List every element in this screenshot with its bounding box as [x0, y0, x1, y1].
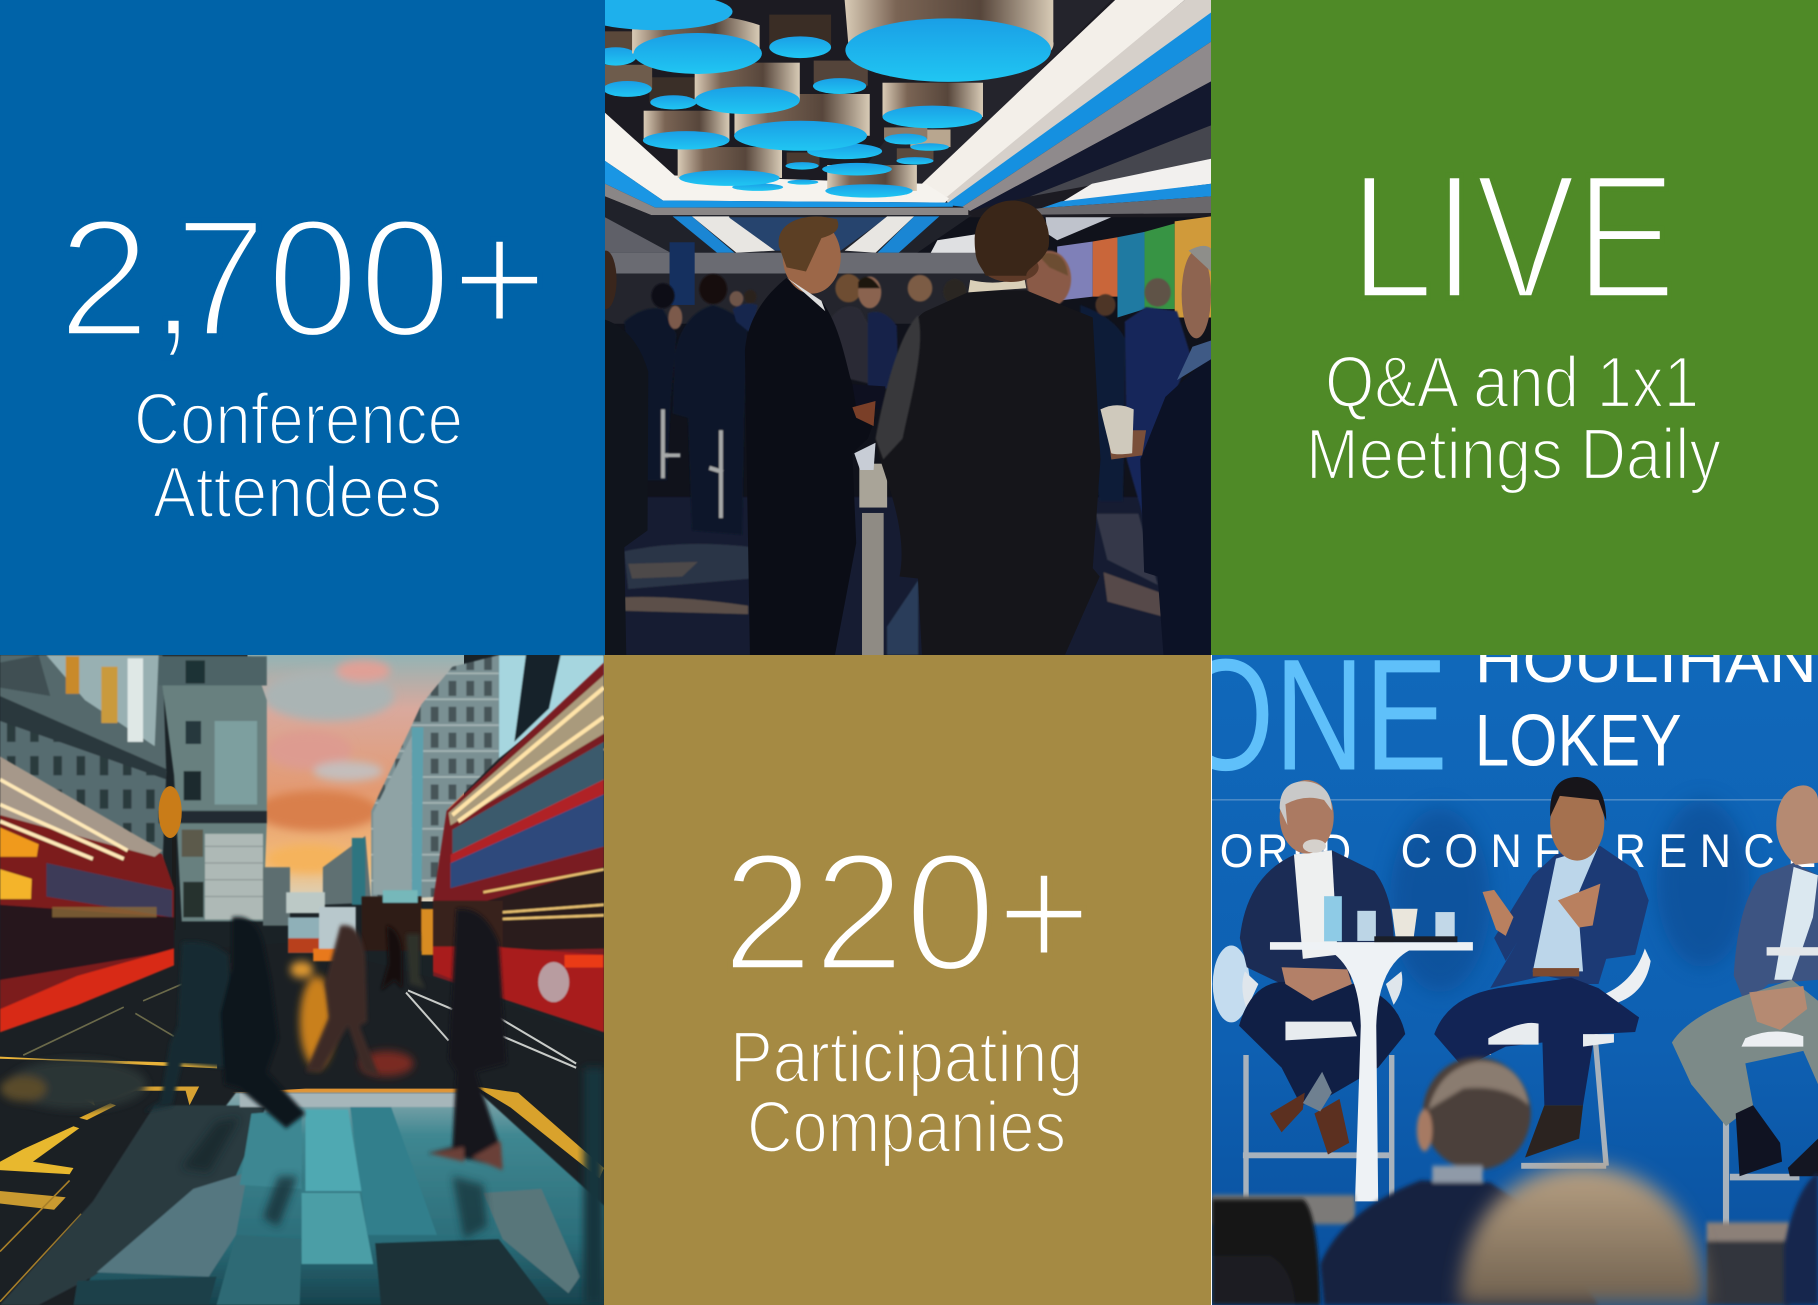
buildings left [0, 655, 290, 926]
clouds [255, 660, 394, 873]
audience member: back of head in focus blur [1320, 1057, 1598, 1305]
stage backdrop wording [1177, 625, 1818, 1022]
stage backdrop wording: CONFERENCE [1401, 824, 1816, 877]
stage backdrop wording: ONE [1177, 627, 1448, 804]
label: Q&amp;A and 1x1: Q&A and 1x1 [1325, 343, 1699, 423]
ceiling light discs [578, 0, 1054, 198]
distant vehicles [288, 890, 437, 961]
label: Conference: Conference [134, 380, 463, 460]
audience member: blurred blonde head [1459, 1166, 1707, 1305]
person: man in dark suit facing right [745, 216, 885, 655]
pedestrian shadows [182, 1118, 487, 1239]
road reflections and markings [0, 961, 604, 1302]
pavement [0, 1093, 604, 1305]
street lamp [159, 786, 182, 930]
panel: conference attendees stat [0, 0, 605, 655]
right edge dark blur [584, 1068, 604, 1305]
buildings right [286, 655, 604, 913]
road [0, 942, 604, 1305]
audience member: right edge shoulder [1784, 1172, 1818, 1305]
number: 220+: 220+ [722, 818, 1092, 1006]
background crowd [624, 251, 1191, 535]
person: left head [595, 251, 617, 309]
back wall and banners [605, 216, 1211, 324]
bus: right red double-decker [433, 663, 604, 1032]
panel: participating companies stat [604, 655, 1211, 1305]
carpet [605, 497, 1211, 655]
panel: live Q&A stat [1211, 0, 1818, 655]
blurred pedestrians [143, 909, 507, 1170]
stage backdrop wording: HOULIHAN [1475, 625, 1817, 696]
stage backdrop wording: LOKEY [1475, 699, 1682, 781]
number: 2,700+: 2,700+ [58, 184, 548, 372]
label: Companies: Companies [747, 1088, 1066, 1168]
headline: LIVE: LIVE [1350, 137, 1676, 336]
label: Attendees: Attendees [153, 453, 442, 533]
sky [247, 655, 464, 901]
photo: blurred London street with red buses at sunset [0, 655, 604, 1305]
person: right foreground with coffee cup [1100, 246, 1211, 655]
panelist: centre man gesturing [1434, 777, 1651, 1166]
person: man in dark suit from behind [876, 200, 1100, 655]
label: Participating: Participating [730, 1018, 1083, 1098]
photo: panel discussion on stage [1177, 625, 1818, 1305]
table [854, 443, 887, 655]
audience chairs [1212, 1199, 1320, 1305]
stage backdrop wording: ORLD [1220, 824, 1351, 877]
panelist: right man [1672, 785, 1818, 1239]
table with bottles and cup [1270, 896, 1473, 1201]
person: left foreground edge [605, 320, 648, 655]
panelist: left man on stool [1239, 780, 1405, 1214]
photo: networking in ballroom with blue ceiling lights [605, 0, 1211, 655]
backdrop shadows [1390, 800, 1749, 992]
bus: left red double-decker [0, 757, 174, 1032]
stage floor [1212, 1195, 1790, 1305]
label: Meetings Daily: Meetings Daily [1306, 415, 1721, 495]
